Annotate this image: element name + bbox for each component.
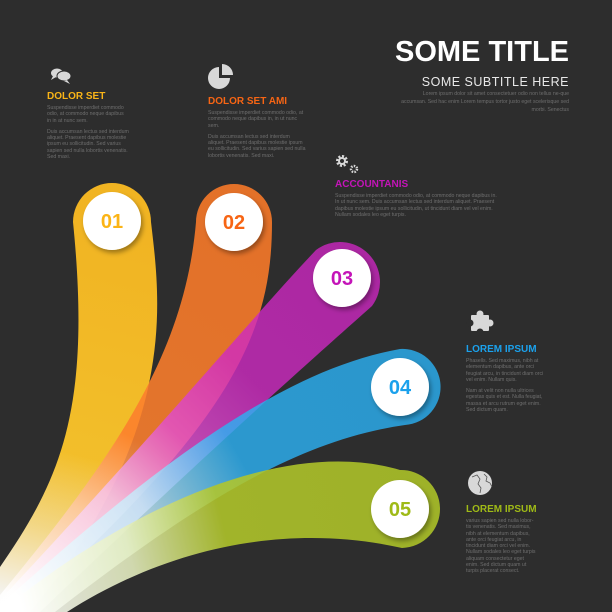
block: dolor set	[47, 91, 129, 160]
block: dolor set ami: Duis accumsan lectus sed interdum aliquet. Praesent dapibus molestie ipsum eu sollicitudin. Sed varius sapien sed nulla lobortis venenatis. Sed maxi.	[208, 134, 305, 159]
title: SOME TITLE	[395, 36, 569, 68]
ribbon 03	[0, 242, 380, 612]
block: accountanis: Suspendisse imperdiet commodo odio, at commodo neque dapibus in. In ut nunc sem. Duis accumsan lectus sed interdum aliquet. Praesent dapibus molestie ipsum eu sollicitudin, ut tincidunt diam vel vel enim. Nullam sodales leo eget turpis.	[335, 193, 497, 218]
block: accountanis: ACCOUNTANIS	[335, 179, 408, 190]
ribbon 01: 01	[101, 211, 123, 233]
ribbon 04: 04	[389, 377, 412, 399]
block: lorem ipsum blue: LOREM IPSUM	[466, 344, 537, 355]
block: lorem ipsum green: varius sapien sed nulla lobor-tis venenatis. Sed maximus, nibh at elementum dapibus, ante orci feugiat arcu, in tincidunt diam orci vel enim. Nullam sodales leo eget turpis aliquam consectetur eget enim. Sed dictum quam ut turpis placerat consect.	[466, 518, 536, 574]
block: lorem ipsum blue	[466, 344, 543, 413]
icon: globe	[468, 471, 492, 495]
ribbon 05	[0, 462, 440, 612]
icon: gears	[338, 156, 357, 172]
intro text: Lorem ipsum dolor sit amet consectetuer odio non tellus ne-que accumsan. Sed hac enim Lorem tempus tortor justo eget scelerisque sed morbi. Senectus	[401, 91, 569, 113]
icon: puzzle	[466, 310, 494, 336]
subtitle: SOME SUBTITLE HERE	[422, 75, 569, 89]
ribbon 05: 05	[389, 499, 411, 521]
block: dolor set: Duis accumsan lectus sed interdum aliquet. Praesent dapibus molestie ipsum eu sollicitudin. Sed varius sapien sed nulla lobortis venenatis. Sed maxi.	[47, 129, 129, 160]
block: accountanis	[335, 179, 497, 218]
block: dolor set ami	[208, 96, 306, 159]
block: dolor set ami: Suspendisse imperdiet commodo odio, at commodo neque dapibus in, in ut nunc sem.	[208, 110, 303, 129]
block: dolor set ami: DOLOR SET AMI	[208, 96, 287, 107]
block: dolor set: DOLOR SET	[47, 91, 105, 102]
icon: pie chart	[208, 64, 233, 89]
icon: speech bubbles	[51, 68, 71, 84]
ribbon 02: 02	[223, 212, 245, 234]
block: lorem ipsum blue: Phasells. Sed maximus, nibh at elementum dapibus, ante orci feugiat arcu, in tincidunt diam orci vel enim. Nullam quis.	[466, 358, 543, 383]
ribbon 01	[0, 183, 157, 612]
ribbon 02	[0, 184, 272, 612]
ribbon 04	[0, 349, 441, 612]
block: lorem ipsum green: LOREM IPSUM	[466, 504, 537, 515]
ribbon 03: 03	[331, 268, 353, 290]
block: lorem ipsum blue: Nam at velit non nulla ultrices egestas quis et est. Nulla feugiat, massa et arcu rutrum eget enim. Sed dictum quam.	[466, 388, 542, 413]
block: dolor set: Suspendisse imperdiet commodo odio, at commodo neque dapibus in in at nunc sem.	[47, 105, 124, 124]
